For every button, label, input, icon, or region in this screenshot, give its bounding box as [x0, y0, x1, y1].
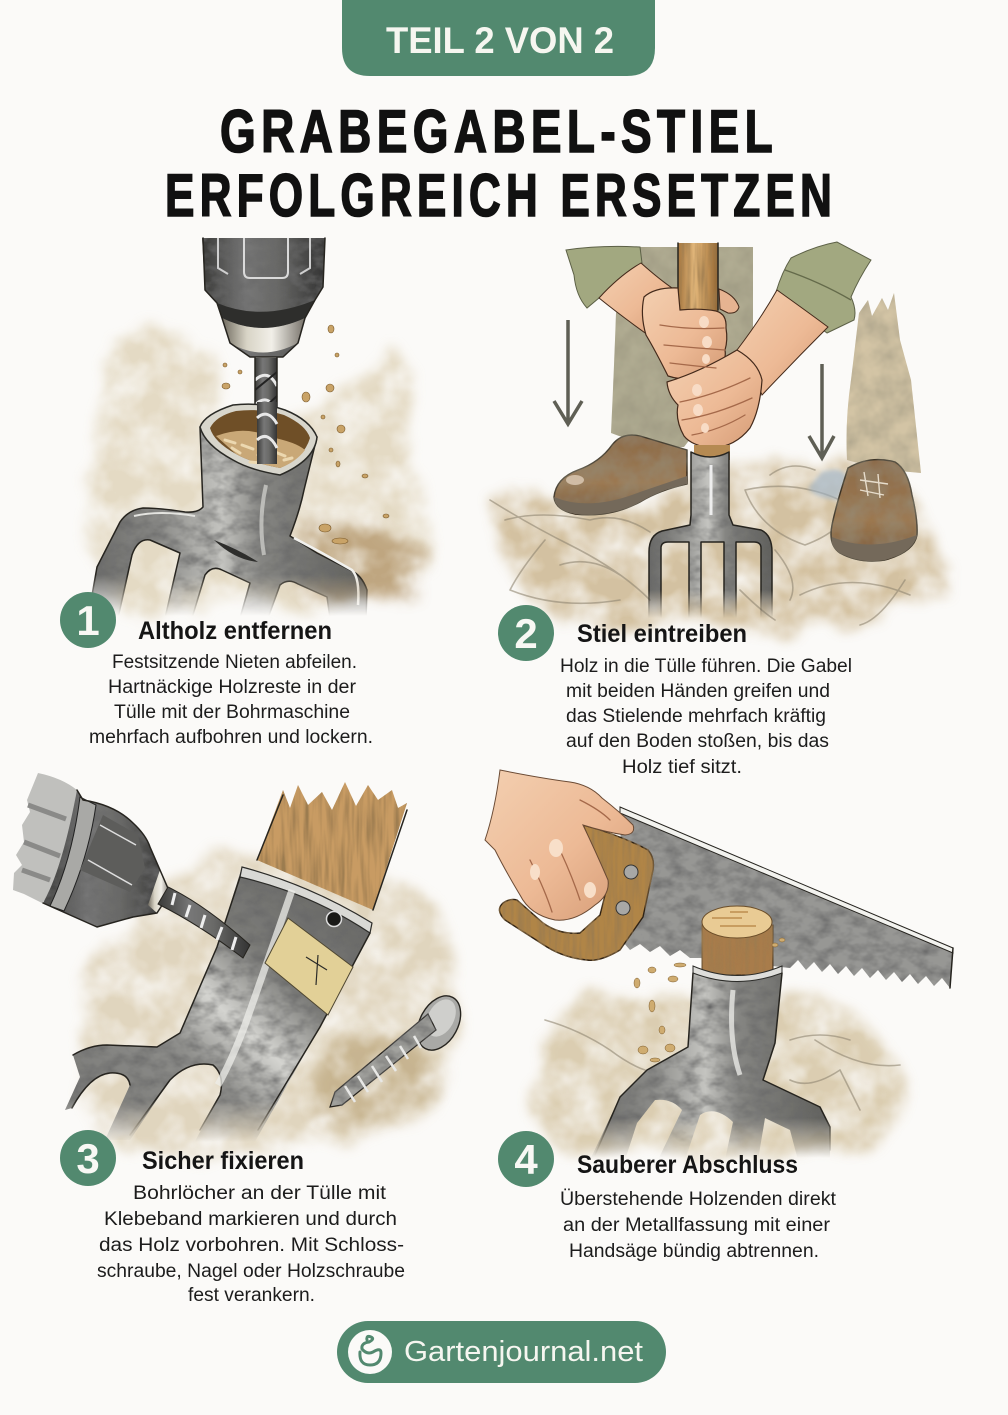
step 2 badge and text: auf den Boden stoßen, bis das	[566, 731, 829, 752]
drill bit	[255, 358, 277, 464]
step 3 badge and text: das Holz vorbohren. Mit Schloss-	[99, 1235, 404, 1256]
step 3 badge and text	[60, 1130, 405, 1306]
step 2 badge and text: Holz tief sitzt.	[622, 757, 742, 778]
step 4 badge and text: Überstehende Holzenden direkt	[560, 1189, 837, 1210]
step 2 badge and text: mit beiden Händen greifen und	[566, 681, 830, 702]
step 1 badge and text: mehrfach aufbohren und lockern.	[89, 727, 373, 748]
step 2 badge and text: Holz in die Tülle führen. Die Gabel	[560, 656, 852, 677]
wooden handle	[678, 243, 718, 313]
fork head with socket	[88, 427, 367, 618]
step 3 badge and text: Bohrlöcher an der Tülle mit	[133, 1183, 387, 1204]
marking tape	[265, 918, 353, 1015]
lag bolt	[330, 988, 469, 1107]
step 1 badge and text: 1	[76, 597, 100, 644]
arrow right	[809, 364, 834, 458]
step 4 badge and text: Handsäge bündig abtrennen.	[569, 1241, 819, 1262]
trousers	[611, 247, 921, 473]
icon: sprout logo	[348, 1330, 392, 1374]
illustration 1: drill in socket	[88, 238, 440, 618]
footer brand pill: Gartenjournal.net	[404, 1336, 643, 1368]
step 2 badge and text	[498, 605, 852, 778]
fork head	[649, 445, 772, 622]
saw blade	[620, 807, 953, 988]
step 4 badge and text: 4	[514, 1136, 538, 1183]
cordless drill chuck	[13, 773, 170, 927]
step 1 badge and text	[60, 592, 373, 748]
title: GRABEGABEL-STIEL	[220, 98, 778, 165]
step 1 badge and text: Hartnäckige Holzreste in der	[108, 677, 357, 698]
sawdust	[634, 938, 785, 1062]
wood debris	[222, 325, 389, 544]
illustration 4: sawing off the handle	[485, 770, 953, 1160]
drilled hole	[326, 912, 342, 926]
drill chuck	[202, 238, 325, 357]
step 3 badge and text: Sicher fixieren	[142, 1147, 304, 1175]
step 4 badge and text: an der Metallfassung mit einer	[563, 1215, 831, 1236]
hand on saw	[485, 770, 634, 920]
angled drill bit	[158, 887, 250, 958]
step 2 badge and text: Stiel eintreiben	[577, 620, 747, 648]
step 4 badge and text: Sauberer Abschluss	[577, 1151, 798, 1179]
arrow left	[554, 320, 582, 424]
footer brand pill	[337, 1321, 666, 1383]
socket and fork head	[590, 966, 830, 1160]
step 1 badge and text: Altholz entfernen	[138, 617, 332, 645]
step 1 badge and text: Tülle mit der Bohrmaschine	[114, 702, 350, 723]
sleeves	[566, 242, 871, 333]
step 3 badge and text: Klebeband markieren und durch	[104, 1209, 397, 1230]
illustration 3: drilling and bolt	[13, 773, 469, 1152]
step 3 badge and text: schraube, Nagel oder Holzschraube	[97, 1261, 405, 1282]
step 3 badge and text: 3	[76, 1135, 100, 1182]
saw handle	[499, 825, 653, 960]
step 2 badge and text: 2	[514, 610, 538, 657]
header tab: TEIL 2 VON 2	[386, 20, 614, 61]
title	[165, 98, 837, 229]
step 4 badge and text	[498, 1131, 837, 1262]
header tab	[342, 0, 655, 76]
splintered wood handle	[257, 782, 407, 910]
arms and gripping hands	[599, 263, 828, 448]
boots	[554, 435, 917, 561]
step 1 badge and text: Festsitzende Nieten abfeilen.	[112, 652, 357, 673]
paving stones	[484, 456, 941, 625]
socket tube and fork head	[65, 867, 372, 1145]
step 3 badge and text: fest verankern.	[188, 1285, 315, 1306]
illustration 2: driving the handle	[484, 242, 941, 625]
step 2 badge and text: das Stielende mehrfach kräftig	[566, 706, 826, 727]
cut wooden stub	[702, 906, 773, 975]
ground wash with paving	[538, 990, 905, 1150]
socket opening with wood chips	[200, 402, 317, 475]
